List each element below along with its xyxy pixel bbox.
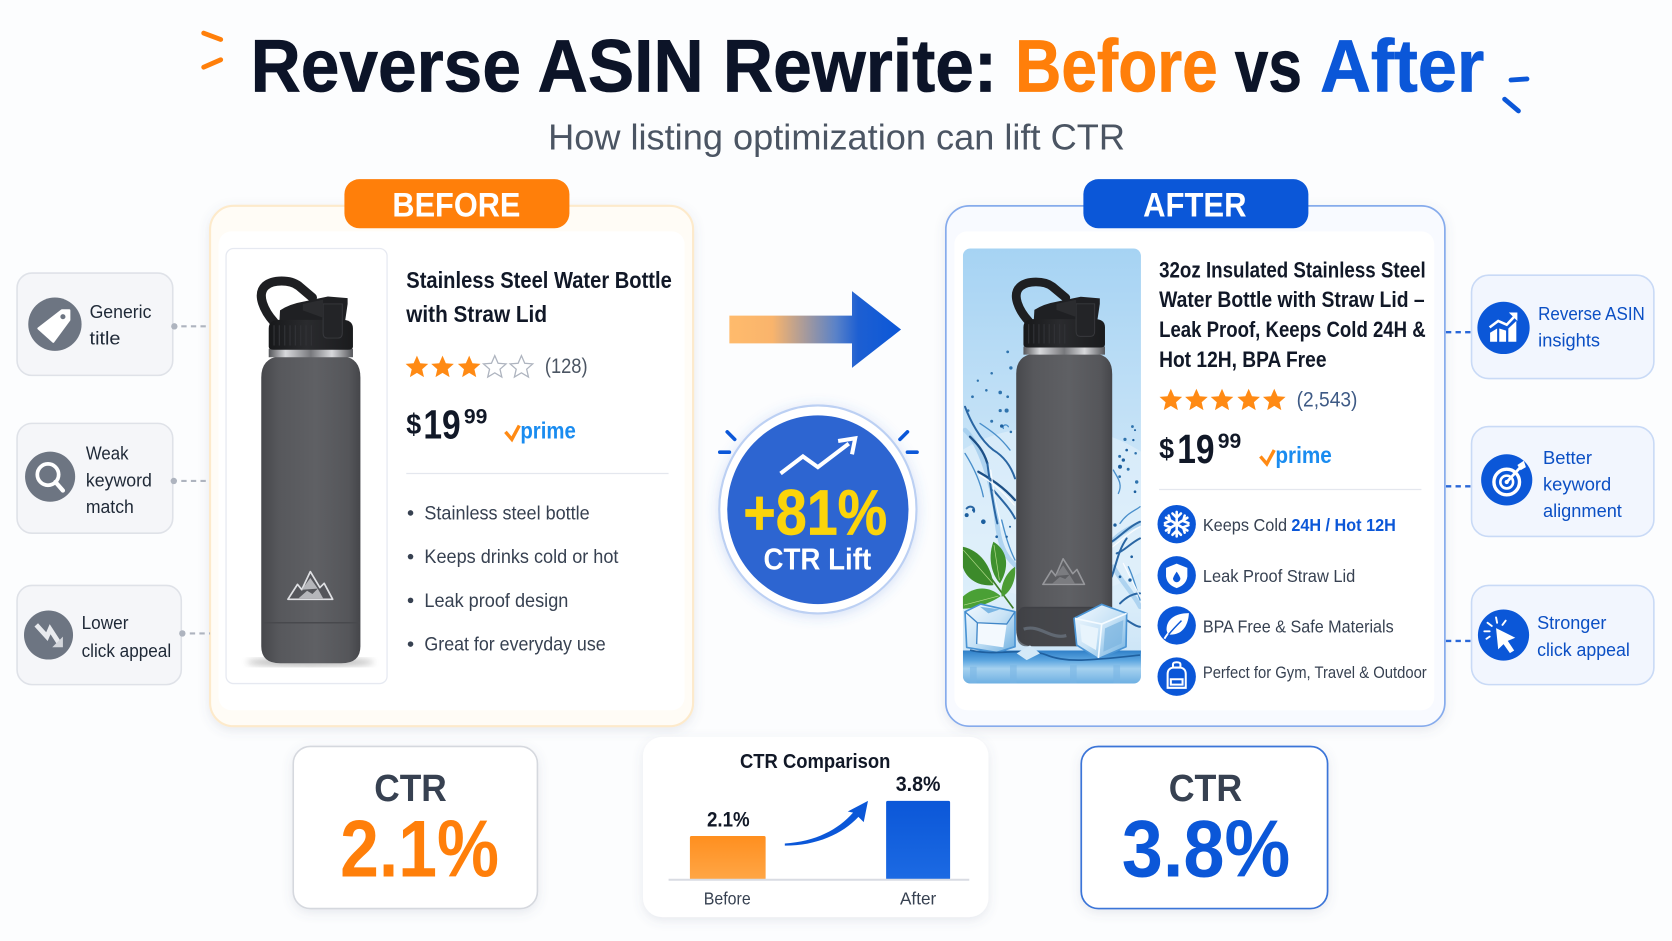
callout: stronger click appeal: Stronger	[1537, 612, 1606, 633]
CTR lift badge	[719, 405, 917, 613]
CTR card: after: CTR	[1169, 767, 1242, 810]
feature: keeps cold: 24H / Hot 12H	[1291, 515, 1396, 535]
chart: CTR comparison: CTR Comparison	[740, 751, 890, 773]
after price	[1159, 426, 1241, 472]
leaves	[963, 542, 1015, 609]
after product title: Hot 12H, BPA Free	[1159, 347, 1327, 372]
after product title	[1159, 257, 1426, 372]
callout: lower click appeal	[17, 585, 210, 685]
title: Reverse ASIN Rewrite:	[251, 24, 997, 108]
callout: better keyword alignment	[1446, 427, 1654, 536]
before star rating	[406, 355, 588, 378]
callout: generic title: title	[90, 327, 120, 348]
bottle logo	[1043, 559, 1084, 584]
ice cubes	[965, 604, 1140, 683]
before badge: BEFORE	[392, 187, 520, 225]
icon: orange accent marks	[204, 33, 221, 67]
feature: leak proof: Leak Proof Straw Lid	[1203, 566, 1355, 586]
before bullet list	[408, 502, 619, 655]
callout: reverse ASIN insights: Reverse ASIN	[1538, 303, 1645, 324]
bar: before: 2.1%	[707, 807, 750, 831]
after product title: Leak Proof, Keeps Cold 24H &	[1159, 317, 1426, 342]
feature: keeps cold	[1157, 505, 1396, 543]
before product title: with Straw Lid	[405, 301, 547, 327]
feature: BPA free: BPA Free & Safe Materials	[1203, 616, 1394, 636]
axis labels: After	[900, 888, 936, 908]
after star rating: (2,543)	[1297, 388, 1357, 411]
after badge: AFTER	[1143, 187, 1247, 225]
before bullet list: Great for everyday use	[424, 633, 606, 655]
bar: before	[690, 807, 766, 880]
arrow: growth curve	[785, 801, 868, 846]
callout: reverse ASIN insights	[1446, 275, 1654, 379]
CTR card: before: CTR	[374, 767, 447, 810]
icon: sparks	[720, 432, 917, 452]
callout: better keyword alignment: Better	[1543, 447, 1592, 468]
after product image	[962, 248, 1141, 684]
callout: better keyword alignment: keyword	[1543, 474, 1611, 495]
callout: weak keyword match: match	[86, 496, 134, 517]
after price: $	[1159, 434, 1174, 466]
CTR lift badge: +81%	[743, 476, 887, 548]
axis labels	[704, 888, 936, 908]
feature: leak proof	[1157, 556, 1355, 595]
CTR lift badge: CTR Lift	[763, 541, 871, 576]
icon: trend arrow	[781, 438, 855, 473]
before bullet list: Stainless steel bottle	[424, 502, 590, 524]
before price	[406, 401, 487, 447]
callout: lower click appeal: click appeal	[82, 640, 171, 661]
before price: $	[406, 409, 421, 441]
title: vs	[1235, 24, 1302, 108]
before product title: Stainless Steel Water Bottle	[406, 267, 672, 293]
panel: before listing	[210, 179, 693, 726]
after star rating	[1160, 388, 1357, 411]
CTR card: before: 2.1%	[340, 805, 499, 895]
after price: 99	[1218, 429, 1241, 453]
callout: stronger click appeal: click appeal	[1537, 639, 1630, 660]
water splash	[965, 407, 1140, 627]
after product title: 32oz Insulated Stainless Steel	[1159, 257, 1426, 282]
callout: generic title	[17, 273, 210, 375]
axis labels: Before	[704, 888, 751, 908]
icon: blue accent marks	[1505, 79, 1527, 111]
bar: after: 3.8%	[896, 772, 941, 796]
before product title	[405, 267, 672, 327]
bar: after	[886, 772, 950, 880]
water floor	[963, 650, 1141, 684]
panel: after listing	[922, 179, 1445, 726]
before prime badge: prime	[520, 417, 576, 443]
after product title: Water Bottle with Straw Lid –	[1159, 287, 1425, 312]
CTR card: before	[293, 746, 537, 909]
before price: 19	[423, 401, 461, 447]
callout: stronger click appeal	[1446, 585, 1654, 685]
callout: weak keyword match: keyword	[86, 469, 152, 490]
before bullet list: Leak proof design	[424, 590, 568, 612]
arrow: before to after	[729, 291, 901, 368]
callout: lower click appeal: Lower	[82, 612, 128, 633]
after price: 19	[1177, 426, 1215, 472]
after badge	[1083, 179, 1308, 228]
feature: BPA free	[1157, 606, 1394, 645]
callout: reverse ASIN insights: insights	[1538, 330, 1600, 351]
subtitle: How listing optimization can lift CTR	[548, 116, 1125, 157]
CTR card: after: 3.8%	[1122, 805, 1290, 895]
feature: gym travel outdoor	[1157, 657, 1427, 696]
feature: keeps cold: Keeps Cold	[1203, 515, 1287, 535]
title	[251, 24, 1484, 108]
CTR card: after	[1081, 746, 1328, 909]
before price: 99	[464, 404, 487, 428]
after prime badge: prime	[1275, 442, 1332, 468]
before star rating: (128)	[545, 355, 588, 378]
before bullet list: Keeps drinks cold or hot	[424, 546, 619, 568]
before badge	[344, 179, 569, 228]
callout: weak keyword match	[17, 423, 210, 533]
callout: weak keyword match: Weak	[86, 443, 129, 464]
before product image	[226, 248, 387, 684]
title: After	[1320, 24, 1484, 108]
feature: gym travel outdoor: Perfect for Gym, Travel & Outdoor	[1203, 663, 1427, 682]
title: Before	[1015, 24, 1218, 108]
callout: generic title: Generic	[90, 301, 151, 322]
callout: better keyword alignment: alignment	[1543, 500, 1623, 521]
chart: CTR comparison	[643, 737, 988, 917]
